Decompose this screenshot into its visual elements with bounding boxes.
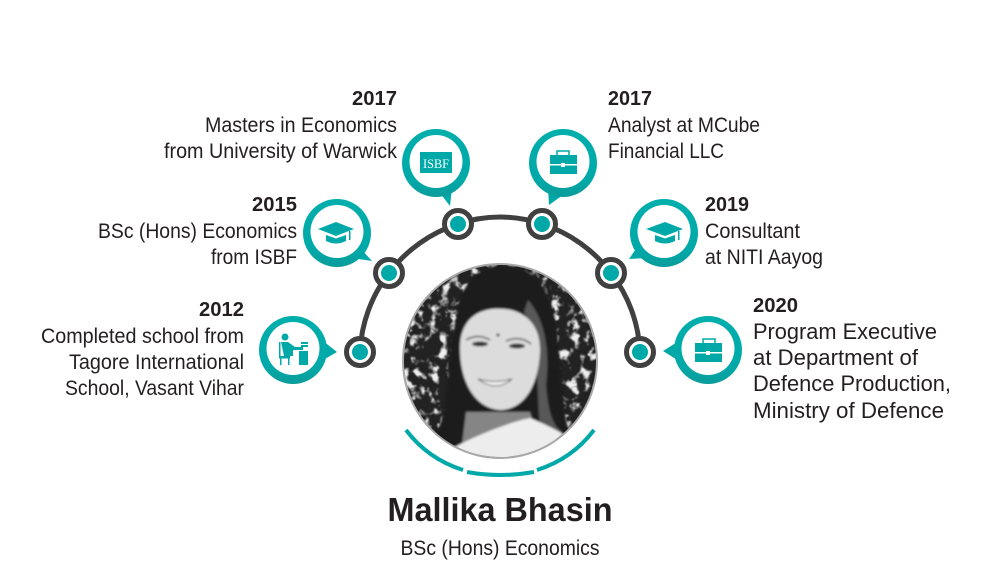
text: 2017 masters: Masters in Economics — [205, 114, 397, 137]
decorative arc under portrait — [406, 430, 594, 475]
text: 2015: BSc (Hons) Economics — [98, 220, 297, 243]
icon: briefcase bubble 2020 — [663, 316, 742, 384]
icon: graduation cap bubble 2015 — [303, 199, 372, 267]
node: 2015 — [376, 260, 402, 286]
text: 2017 masters: from University of Warwick — [164, 140, 397, 163]
text: 2019: 2019 — [705, 193, 749, 216]
node: 2012 — [346, 338, 374, 366]
text: 2017 masters — [164, 87, 397, 163]
text: 2017 analyst — [608, 87, 760, 163]
node: 2020 — [626, 338, 654, 366]
text: 2019: Consultant — [705, 220, 800, 243]
text: 2020 — [753, 294, 951, 423]
text: 2019 — [705, 193, 823, 269]
icon: graduation cap bubble 2019 — [629, 199, 698, 267]
text: 2017 analyst: Analyst at MCube — [608, 114, 760, 137]
text: 2020: 2020 — [753, 294, 798, 317]
text: 2017 masters: 2017 — [352, 87, 397, 110]
text: 2012: 2012 — [199, 298, 244, 321]
text: 2015: 2015 — [252, 193, 297, 216]
text: 2015 — [98, 193, 297, 269]
text: 2020: Defence Production, — [753, 371, 951, 396]
icon: student at desk bubble 2012 — [259, 316, 337, 384]
portrait photo — [400, 260, 600, 470]
text: 2012 — [41, 298, 244, 400]
text: 2017 analyst: 2017 — [608, 87, 652, 110]
node: 2017 masters — [444, 210, 472, 238]
text: 2017 analyst: Financial LLC — [608, 140, 724, 163]
timeline arc — [360, 217, 640, 352]
text: 2012: School, Vasant Vihar — [65, 377, 244, 400]
icon: briefcase bubble 2017 — [529, 129, 597, 205]
icon: ISBF bubble: ISBF — [423, 156, 449, 171]
text: 2019: at NITI Aayog — [705, 246, 823, 269]
text: 2012: Completed school from — [41, 325, 244, 348]
text: 2012: Tagore International — [69, 351, 244, 374]
icon: ISBF bubble — [402, 129, 470, 206]
subtitle: BSc (Hons) Economics — [400, 537, 600, 560]
text: 2015: from ISBF — [211, 246, 297, 269]
text: 2020: at Department of — [753, 345, 919, 370]
node: 2019 — [598, 260, 624, 286]
node: 2017 analyst — [528, 210, 556, 238]
text: 2020: Ministry of Defence — [753, 398, 944, 423]
name heading: Mallika Bhasin — [388, 491, 612, 528]
text: 2020: Program Executive — [753, 319, 937, 344]
